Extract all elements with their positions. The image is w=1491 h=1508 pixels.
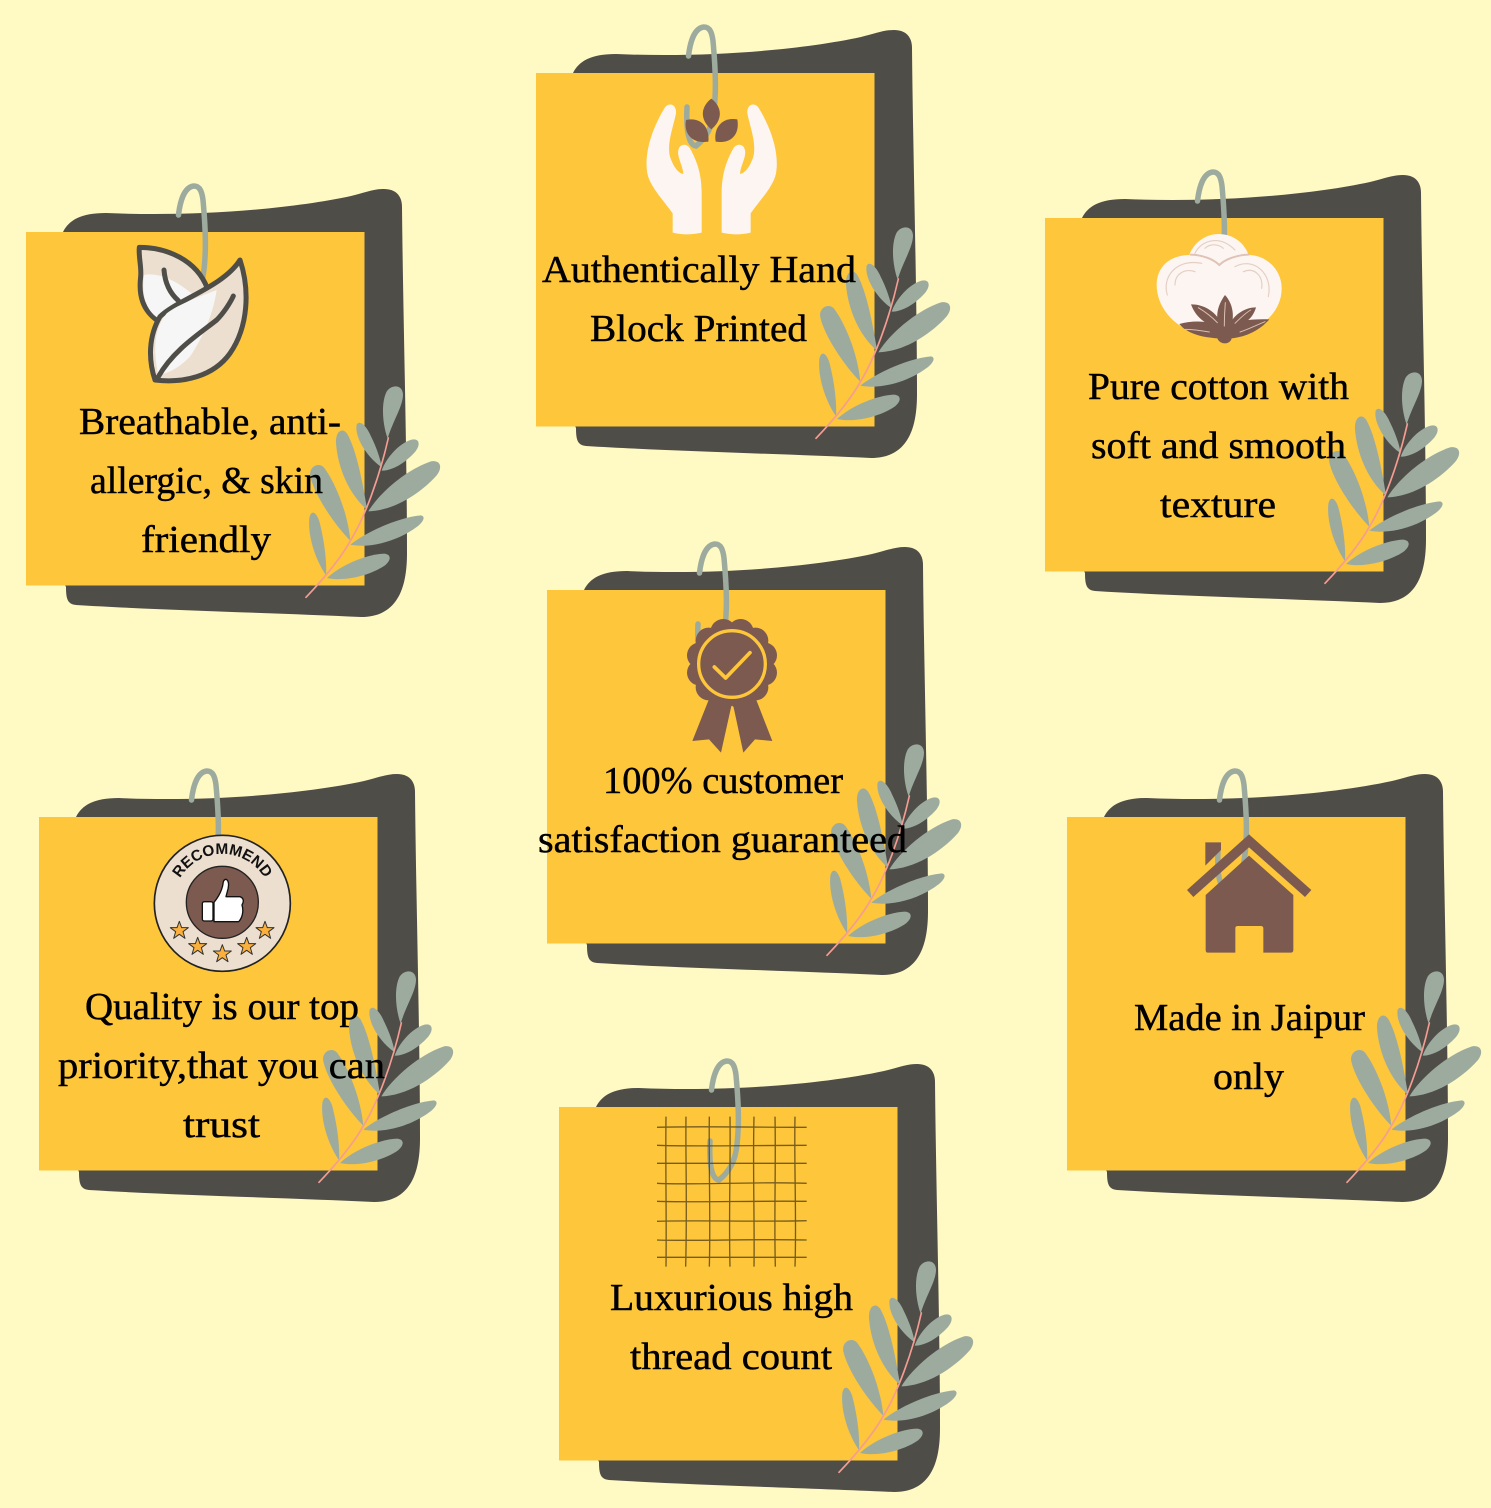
icon: woven grid [657, 1117, 807, 1267]
panel: quality [39, 768, 454, 1202]
panel: pure cotton [1045, 172, 1459, 603]
text: hand block printed: Block Printed [590, 308, 807, 350]
icon: recommend badge: RECOMMEND [172, 843, 272, 878]
icon: cotton boll [1157, 234, 1282, 343]
text: pure cotton: texture [1160, 484, 1276, 526]
panel: thread count [559, 1061, 973, 1492]
text: hand block printed [542, 249, 856, 350]
text: customer satisfaction: satisfaction guaranteed [538, 819, 907, 861]
panel: breathable [26, 186, 440, 617]
text: thread count [610, 1277, 853, 1378]
text: pure cotton [1088, 366, 1349, 526]
panel: hand block printed [536, 27, 950, 458]
text: quality: Quality is our top [85, 986, 359, 1028]
panel: customer satisfaction [538, 544, 961, 975]
icon: hands and seeds [647, 99, 777, 234]
icon: recommend badge [154, 834, 292, 972]
icon: leaves [139, 247, 246, 381]
text: quality [58, 986, 385, 1146]
text: pure cotton: Pure cotton with [1088, 366, 1349, 408]
text: customer satisfaction [538, 760, 907, 861]
text: breathable: allergic, & skin [90, 460, 323, 502]
text: pure cotton: soft and smooth [1091, 425, 1346, 467]
text: quality: trust [183, 1104, 260, 1146]
panel: made in jaipur [1067, 771, 1481, 1202]
text: thread count: Luxurious high [610, 1277, 853, 1319]
text: breathable: Breathable, anti- [79, 401, 341, 443]
icon: house [1187, 834, 1311, 953]
text: quality: priority,that you can [58, 1045, 385, 1087]
text: thread count: thread count [630, 1336, 832, 1378]
text: made in jaipur: Made in Jaipur [1134, 997, 1365, 1039]
text: breathable [79, 401, 341, 561]
text: customer satisfaction: 100% customer [603, 760, 843, 802]
text: made in jaipur [1134, 997, 1365, 1098]
icon: rosette badge [687, 619, 777, 753]
text: made in jaipur: only [1213, 1056, 1284, 1098]
text: breathable: friendly [141, 519, 271, 561]
text: hand block printed: Authentically Hand [542, 249, 856, 291]
